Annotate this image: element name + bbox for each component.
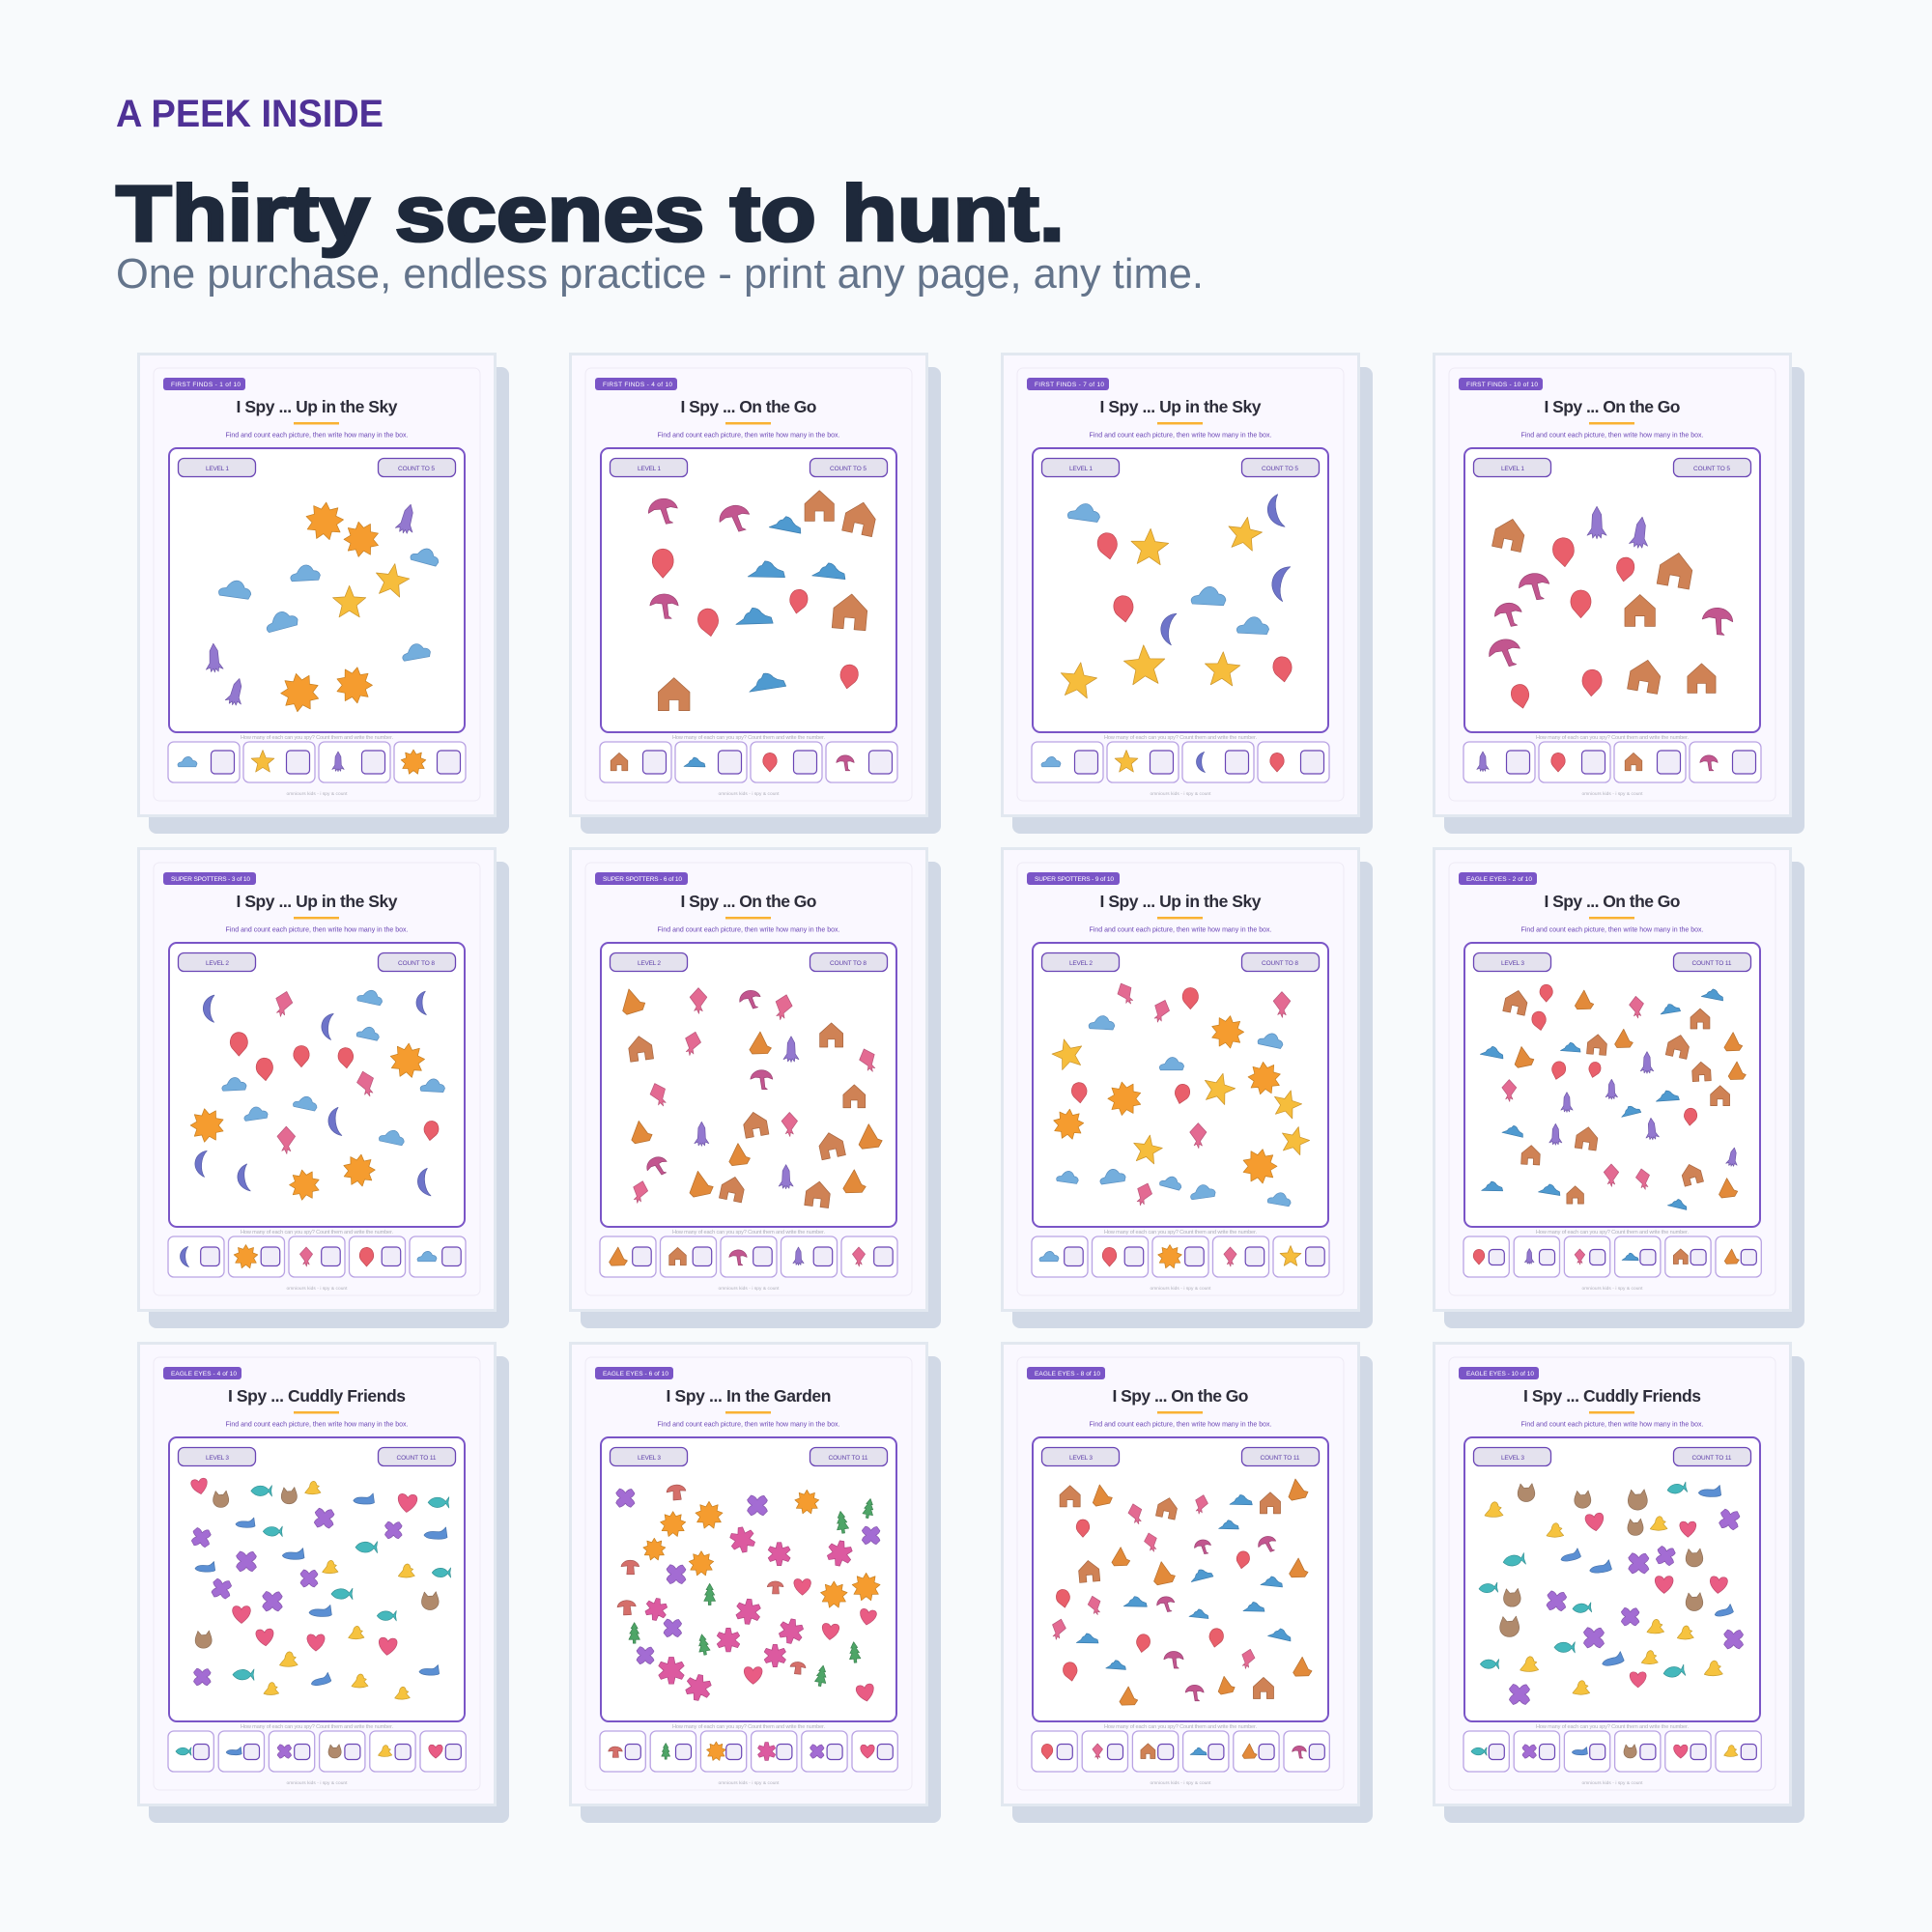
key caption: How many of each can you spy? Count them and write the number. <box>241 1230 393 1236</box>
badge <box>163 872 256 885</box>
inner card <box>154 368 480 801</box>
count pill: COUNT TO 11 <box>1692 1455 1732 1462</box>
level pill <box>1474 1447 1551 1466</box>
count pill <box>379 952 456 972</box>
level pill: LEVEL 1 <box>638 466 661 472</box>
inner card <box>1449 863 1776 1295</box>
scene shapes <box>1486 506 1734 710</box>
title underline <box>294 422 339 425</box>
page sheet <box>1434 354 1791 815</box>
key caption: How many of each can you spy? Count them and write the number. <box>1536 1230 1689 1236</box>
key caption: How many of each can you spy? Count them and write the number. <box>672 735 825 741</box>
instructions: Find and count each picture, then write how many in the box. <box>1090 927 1272 933</box>
page sheet <box>139 848 495 1310</box>
level pill <box>611 952 688 972</box>
scene shapes <box>616 1484 880 1703</box>
badge <box>1027 378 1109 390</box>
counting key <box>1463 1236 1761 1277</box>
worksheet: eagle eyes 8 of 10 <box>1003 1343 1373 1823</box>
subtitle: One purchase, endless practice - print any page, any time. <box>116 250 1204 298</box>
page shadow <box>581 367 941 834</box>
title underline <box>1157 422 1203 425</box>
count pill <box>1242 952 1320 972</box>
counting key <box>168 1731 466 1772</box>
worksheet title: I Spy ... Up in the Sky <box>236 892 398 911</box>
page sheet <box>570 848 927 1310</box>
counting key <box>600 742 897 782</box>
scene frame <box>169 1437 465 1721</box>
footer: omniours kids - i spy & count <box>1582 791 1643 797</box>
badge <box>163 378 245 390</box>
inner card <box>154 1357 480 1790</box>
scene shapes <box>1480 984 1746 1209</box>
scene frame <box>601 1437 896 1721</box>
scene frame <box>1033 943 1328 1227</box>
count pill <box>1242 1447 1320 1466</box>
level pill: LEVEL 1 <box>1501 466 1524 472</box>
page shadow <box>1444 862 1804 1328</box>
page sheet <box>570 354 927 815</box>
page sheet <box>1003 1343 1358 1804</box>
key caption: How many of each can you spy? Count them and write the number. <box>1104 1724 1257 1730</box>
instructions: Find and count each picture, then write how many in the box. <box>1090 1422 1272 1428</box>
worksheet title: I Spy ... On the Go <box>1544 892 1681 911</box>
title underline <box>1589 917 1634 920</box>
count pill <box>1673 458 1750 477</box>
worksheet: super spotters 3 of 10 <box>139 848 509 1328</box>
count pill: COUNT TO 11 <box>1260 1455 1300 1462</box>
inner card <box>1449 368 1776 801</box>
badge: SUPER SPOTTERS - 3 of 10 <box>171 876 250 883</box>
page shadow <box>149 862 509 1328</box>
count pill: COUNT TO 5 <box>830 466 867 472</box>
scene frame <box>1464 448 1760 732</box>
key caption: How many of each can you spy? Count them and write the number. <box>241 1724 393 1730</box>
footer: omniours kids - i spy & count <box>1582 1780 1643 1786</box>
level pill <box>1474 952 1551 972</box>
count pill: COUNT TO 5 <box>1693 466 1730 472</box>
level pill <box>1041 1447 1119 1466</box>
inner card <box>154 863 480 1295</box>
page sheet <box>1434 1343 1791 1804</box>
worksheet: first finds 4 of 10 <box>570 354 941 834</box>
inner card <box>1449 1357 1776 1790</box>
badge <box>595 1367 673 1379</box>
scene shapes <box>1049 1477 1312 1705</box>
worksheet title: I Spy ... On the Go <box>1544 397 1681 416</box>
badge: EAGLE EYES - 10 of 10 <box>1466 1371 1534 1378</box>
worksheet: first finds 10 of 10 <box>1434 354 1804 834</box>
counting key <box>1463 742 1761 782</box>
count pill: COUNT TO 11 <box>396 1455 437 1462</box>
level pill <box>1474 458 1551 477</box>
scene shapes <box>617 986 883 1208</box>
badge <box>1027 1367 1105 1379</box>
badge: SUPER SPOTTERS - 9 of 10 <box>1035 876 1114 883</box>
instructions: Find and count each picture, then write how many in the box. <box>1090 433 1272 439</box>
worksheet: super spotters 9 of 10 <box>1003 848 1373 1328</box>
worksheet title: I Spy ... Cuddly Friends <box>1523 1386 1701 1406</box>
level pill: LEVEL 3 <box>1501 1455 1524 1462</box>
level pill: LEVEL 2 <box>638 960 661 967</box>
count pill <box>1673 952 1750 972</box>
count pill <box>810 458 887 477</box>
badge <box>1027 872 1120 885</box>
footer: omniours kids - i spy & count <box>286 1286 348 1292</box>
worksheet: eagle eyes 4 of 10 <box>139 1343 509 1823</box>
page shadow <box>1012 367 1373 834</box>
instructions: Find and count each picture, then write how many in the box. <box>657 1422 840 1428</box>
count pill: COUNT TO 8 <box>1262 960 1298 967</box>
worksheet title: I Spy ... Cuddly Friends <box>228 1386 406 1406</box>
footer: omniours kids - i spy & count <box>286 1780 348 1786</box>
worksheet title: I Spy ... On the Go <box>680 397 817 416</box>
instructions: Find and count each picture, then write how many in the box. <box>226 927 409 933</box>
scene frame <box>169 448 465 732</box>
worksheet: super spotters 6 of 10 <box>570 848 941 1328</box>
level pill: LEVEL 3 <box>206 1455 229 1462</box>
level pill <box>1041 458 1119 477</box>
level pill <box>1041 952 1119 972</box>
counting key <box>1463 1731 1761 1772</box>
level pill <box>611 458 688 477</box>
badge: FIRST FINDS - 7 of 10 <box>1035 382 1104 388</box>
level pill: LEVEL 3 <box>1501 960 1524 967</box>
count pill <box>810 952 887 972</box>
level pill: LEVEL 3 <box>1069 1455 1093 1462</box>
worksheet: first finds 7 of 10 <box>1003 354 1373 834</box>
instructions: Find and count each picture, then write how many in the box. <box>226 433 409 439</box>
worksheet: eagle eyes 2 of 10 <box>1434 848 1804 1328</box>
scene shapes <box>190 1478 451 1699</box>
scene shapes <box>205 500 441 714</box>
instructions: Find and count each picture, then write how many in the box. <box>1520 1422 1704 1428</box>
scene frame <box>601 448 896 732</box>
page shadow <box>581 1356 941 1823</box>
count pill <box>379 1447 456 1466</box>
page shadow <box>581 862 941 1328</box>
worksheet title: I Spy ... On the Go <box>680 892 817 911</box>
title underline <box>1157 917 1203 920</box>
instructions: Find and count each picture, then write how many in the box. <box>657 433 840 439</box>
badge: SUPER SPOTTERS - 6 of 10 <box>603 876 682 883</box>
level pill <box>178 952 255 972</box>
badge <box>595 872 688 885</box>
scene shapes <box>646 491 878 711</box>
page sheet <box>1003 848 1358 1310</box>
instructions: Find and count each picture, then write how many in the box. <box>1520 927 1704 933</box>
level pill <box>178 458 255 477</box>
badge: EAGLE EYES - 8 of 10 <box>1035 1371 1100 1378</box>
counting key <box>168 1236 466 1277</box>
page sheet <box>1003 354 1358 815</box>
instructions: Find and count each picture, then write how many in the box. <box>1520 433 1704 439</box>
page sheet <box>570 1343 927 1804</box>
worksheet title: I Spy ... Up in the Sky <box>236 397 398 416</box>
page shadow <box>1444 1356 1804 1823</box>
instructions: Find and count each picture, then write how many in the box. <box>226 1422 409 1428</box>
footer: omniours kids - i spy & count <box>1582 1286 1643 1292</box>
inner card <box>585 863 912 1295</box>
page sheet <box>1434 848 1791 1310</box>
scene shapes <box>188 987 445 1202</box>
worksheet: first finds 1 of 10 <box>139 354 509 834</box>
badge <box>1459 1367 1539 1379</box>
title underline <box>294 917 339 920</box>
level pill: LEVEL 2 <box>206 960 229 967</box>
badge <box>595 378 677 390</box>
worksheet title: I Spy ... On the Go <box>1113 1386 1248 1406</box>
scene shapes <box>1479 1482 1744 1705</box>
scene frame <box>1033 1437 1328 1721</box>
page shadow <box>1012 1356 1373 1823</box>
title underline <box>1157 1411 1203 1414</box>
title underline <box>1589 422 1634 425</box>
count pill <box>1242 458 1320 477</box>
count pill <box>810 1447 887 1466</box>
badge <box>1459 872 1537 885</box>
scene frame <box>1464 943 1760 1227</box>
title underline <box>725 1411 771 1414</box>
worksheet title: I Spy ... Up in the Sky <box>1099 892 1262 911</box>
key caption: How many of each can you spy? Count them and write the number. <box>1536 1724 1689 1730</box>
worksheet title: I Spy ... In the Garden <box>667 1386 831 1406</box>
badge: EAGLE EYES - 2 of 10 <box>1466 876 1532 883</box>
footer: omniours kids - i spy & count <box>1150 1286 1211 1292</box>
badge: FIRST FINDS - 1 of 10 <box>171 382 241 388</box>
scene frame <box>1033 448 1328 732</box>
counting key <box>1032 1236 1329 1277</box>
level pill <box>611 1447 688 1466</box>
badge <box>1459 378 1543 390</box>
scene shapes <box>1058 494 1293 699</box>
badge: EAGLE EYES - 6 of 10 <box>603 1371 668 1378</box>
key caption: How many of each can you spy? Count them and write the number. <box>1104 735 1257 741</box>
footer: omniours kids - i spy & count <box>286 791 348 797</box>
title underline <box>725 422 771 425</box>
counting key <box>600 1731 897 1772</box>
count pill: COUNT TO 5 <box>398 466 435 472</box>
counting key <box>1032 742 1329 782</box>
level pill: LEVEL 1 <box>206 466 229 472</box>
title: Thirty scenes to hunt. <box>116 170 1065 258</box>
key caption: How many of each can you spy? Count them and write the number. <box>672 1230 825 1236</box>
key caption: How many of each can you spy? Count them and write the number. <box>672 1724 825 1730</box>
badge: EAGLE EYES - 4 of 10 <box>171 1371 237 1378</box>
page shadow <box>149 1356 509 1823</box>
worksheet: eagle eyes 6 of 10 <box>570 1343 941 1823</box>
worksheet title: I Spy ... Up in the Sky <box>1099 397 1262 416</box>
badge: FIRST FINDS - 4 of 10 <box>603 382 672 388</box>
level pill: LEVEL 1 <box>1069 466 1093 472</box>
inner card <box>1017 863 1344 1295</box>
key caption: How many of each can you spy? Count them and write the number. <box>1536 735 1689 741</box>
scene frame <box>601 943 896 1227</box>
counting key <box>1032 1731 1329 1772</box>
title underline <box>294 1411 339 1414</box>
badge: FIRST FINDS - 10 of 10 <box>1466 382 1538 388</box>
title underline <box>1589 1411 1634 1414</box>
level pill: LEVEL 3 <box>638 1455 661 1462</box>
count pill: COUNT TO 8 <box>830 960 867 967</box>
level pill <box>178 1447 255 1466</box>
title underline <box>725 917 771 920</box>
scene shapes <box>1049 980 1312 1208</box>
inner card <box>585 1357 912 1790</box>
footer: omniours kids - i spy & count <box>719 1286 780 1292</box>
counting key <box>600 1236 897 1277</box>
key caption: How many of each can you spy? Count them and write the number. <box>1104 1230 1257 1236</box>
counting key <box>168 742 466 782</box>
worksheet: eagle eyes 10 of 10 <box>1434 1343 1804 1823</box>
footer: omniours kids - i spy & count <box>719 791 780 797</box>
footer: omniours kids - i spy & count <box>1150 1780 1211 1786</box>
scene frame <box>169 943 465 1227</box>
badge <box>163 1367 242 1379</box>
level pill: LEVEL 2 <box>1069 960 1093 967</box>
count pill: COUNT TO 5 <box>1262 466 1298 472</box>
eyebrow heading: A PEEK INSIDE <box>116 93 384 135</box>
inner card <box>1017 368 1344 801</box>
inner card <box>1017 1357 1344 1790</box>
page shadow <box>1444 367 1804 834</box>
count pill <box>379 458 456 477</box>
scene frame <box>1464 1437 1760 1721</box>
count pill <box>1673 1447 1750 1466</box>
key caption: How many of each can you spy? Count them and write the number. <box>241 735 393 741</box>
instructions: Find and count each picture, then write how many in the box. <box>657 927 840 933</box>
count pill: COUNT TO 8 <box>398 960 435 967</box>
count pill: COUNT TO 11 <box>829 1455 868 1462</box>
inner card <box>585 368 912 801</box>
page sheet <box>139 354 495 815</box>
page shadow <box>149 367 509 834</box>
footer: omniours kids - i spy & count <box>719 1780 780 1786</box>
footer: omniours kids - i spy & count <box>1150 791 1211 797</box>
page sheet <box>139 1343 495 1804</box>
page shadow <box>1012 862 1373 1328</box>
count pill: COUNT TO 11 <box>1692 960 1732 967</box>
